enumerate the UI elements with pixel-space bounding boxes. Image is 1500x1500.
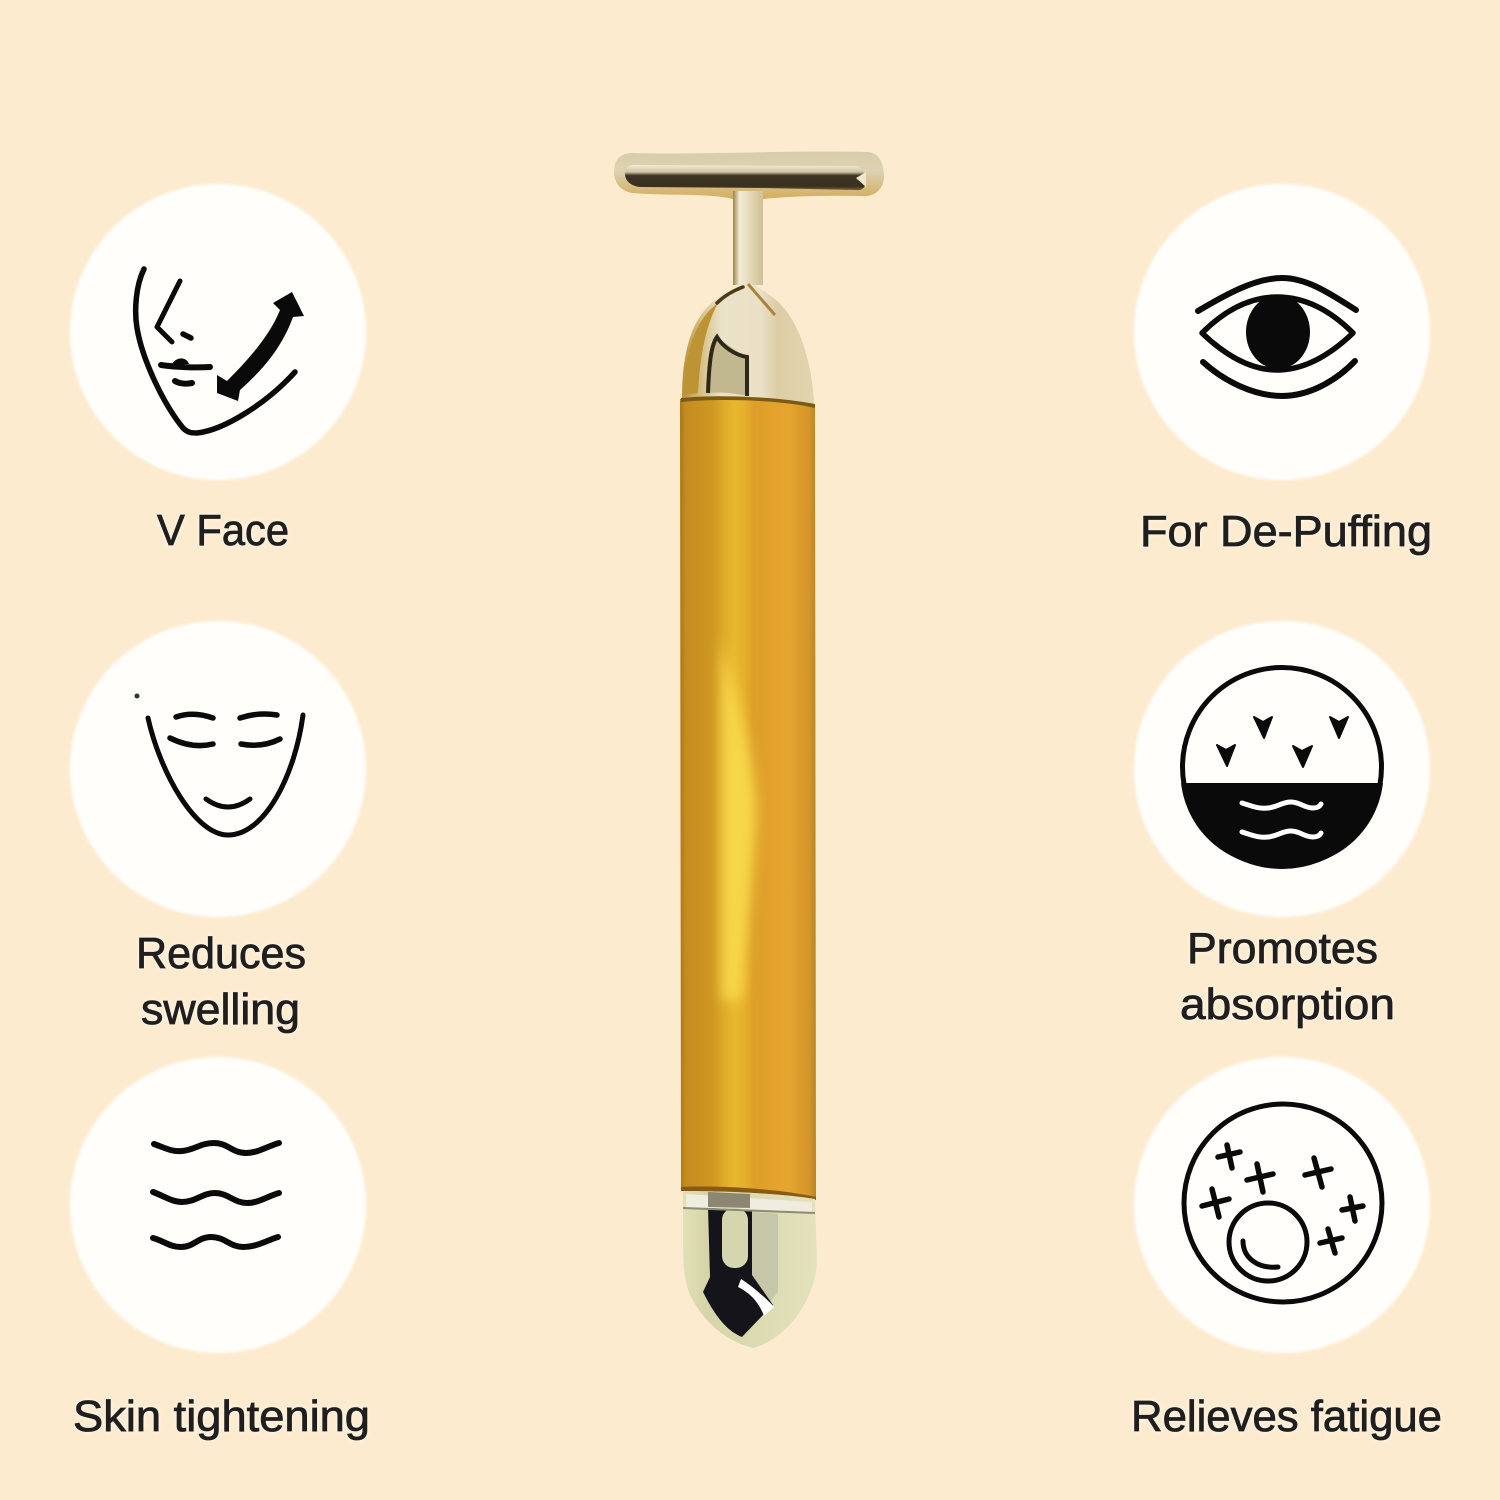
icon circle: Promotes absorption bbox=[1134, 621, 1430, 917]
label: Reduces swelling: swelling bbox=[141, 985, 300, 1034]
panel: V Face bbox=[70, 184, 366, 555]
icon: circle with sparkles bbox=[1184, 1104, 1382, 1302]
product: gold T-bar massager wand bbox=[614, 152, 884, 1348]
label: Skin tightening: Skin tightening bbox=[73, 1392, 370, 1441]
label: Relieves fatigue: Relieves fatigue bbox=[1131, 1392, 1442, 1441]
icon circle: For De-Puffing bbox=[1134, 184, 1430, 480]
label: Reduces swelling: Reduces bbox=[136, 929, 306, 978]
label: Promotes absorption: Promotes bbox=[1187, 924, 1378, 973]
wand upper cap bbox=[682, 283, 814, 405]
icon: absorption circle bbox=[1181, 668, 1383, 868]
label: Promotes absorption bbox=[1180, 924, 1395, 1029]
icon circle: Reduces swelling bbox=[70, 621, 366, 917]
wand gold body bbox=[680, 396, 816, 1200]
panel: Relieves fatigue bbox=[1131, 1057, 1442, 1441]
icon: three wavy lines bbox=[153, 1143, 279, 1247]
panel: Skin tightening bbox=[70, 1057, 370, 1441]
icon: eye bbox=[1198, 278, 1356, 396]
panel: For De-Puffing bbox=[1134, 184, 1432, 556]
icon: face with lift arrow bbox=[136, 269, 304, 433]
label: Promotes absorption: absorption bbox=[1180, 980, 1395, 1029]
label: V Face: V Face bbox=[157, 506, 289, 555]
wand T-bar head bbox=[614, 152, 884, 199]
icon: relaxed face bbox=[134, 694, 303, 835]
icon circle: V Face bbox=[70, 184, 366, 480]
wand neck bbox=[733, 191, 763, 285]
label: Reduces swelling bbox=[136, 929, 306, 1034]
panel: Reduces swelling bbox=[70, 621, 366, 1034]
icon circle: Skin tightening bbox=[70, 1057, 366, 1353]
panel: Promotes absorption bbox=[1134, 621, 1430, 1029]
label: For De-Puffing: For De-Puffing bbox=[1140, 507, 1432, 556]
wand lower tip bbox=[683, 1191, 817, 1348]
icon circle: Relieves fatigue bbox=[1134, 1057, 1430, 1353]
